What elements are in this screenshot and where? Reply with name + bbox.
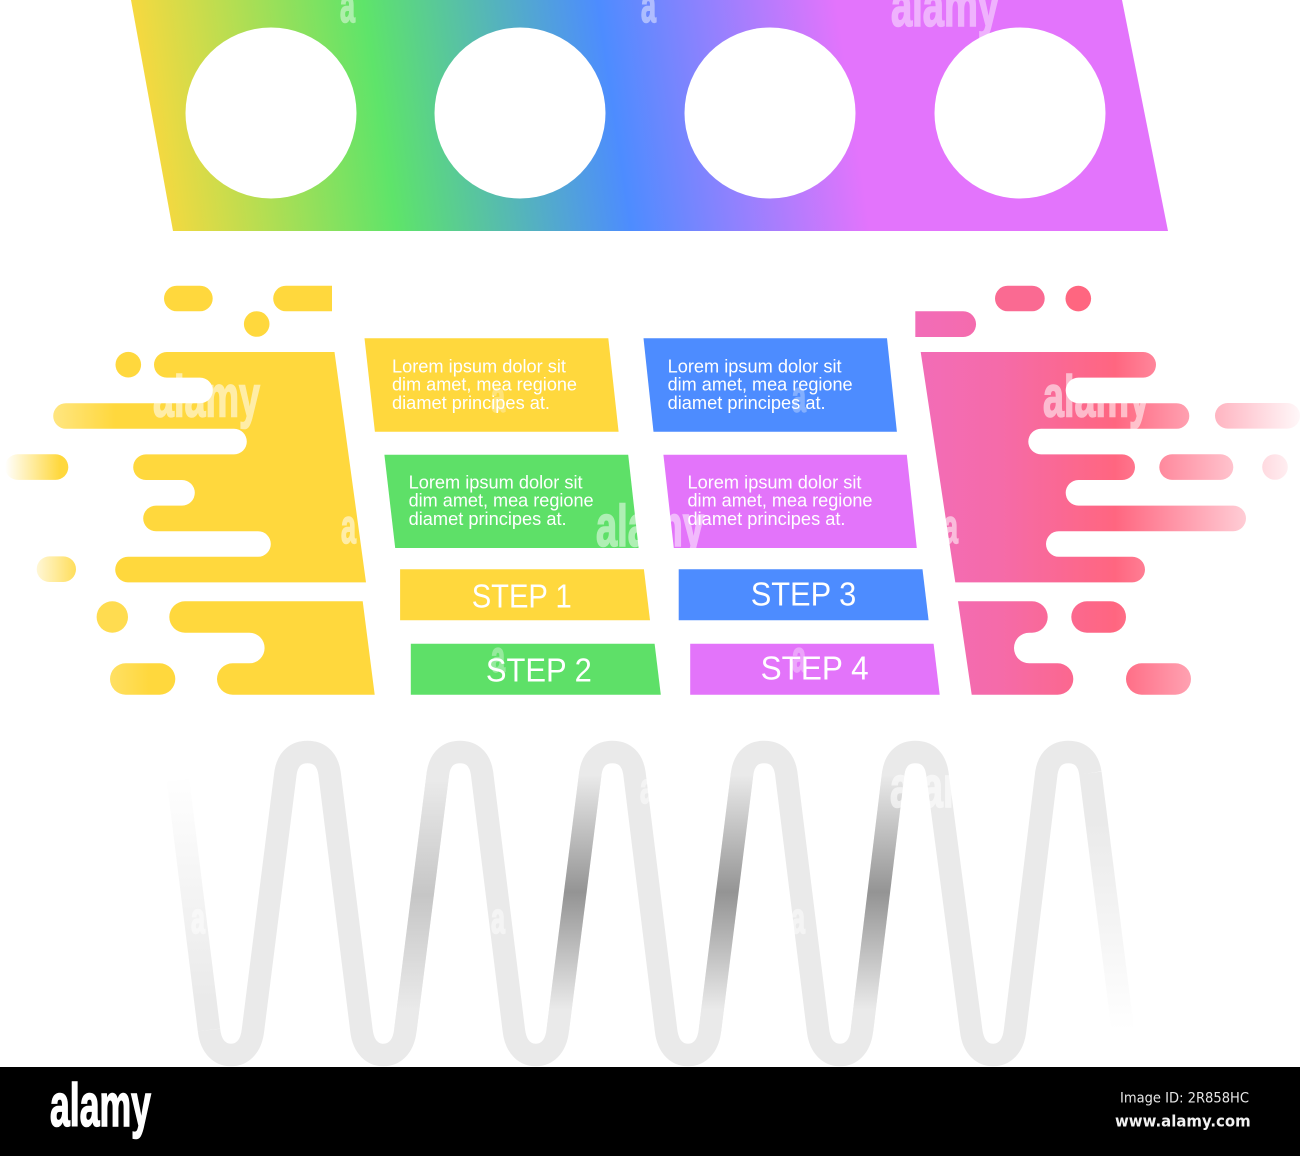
pink dot top [1066,286,1091,311]
circle 1 [186,28,356,198]
spring shaded leg 3 [558,773,590,1030]
text block green: dim amet, mea regione [409,491,594,511]
text block blue: Lorem ipsum dolor sit [668,357,842,377]
watermark a on blue panel: a [792,373,806,422]
watermark a on pink edge: a [943,501,958,554]
panel: blue lorem text [644,338,897,432]
pink pill top [995,286,1045,311]
panel: purple lorem text [663,455,917,548]
step 1 label: STEP 1 [472,577,572,614]
text block yellow: diamet principes at. [392,393,550,413]
grey zigzag spring [178,752,1123,1055]
circle 2 [434,28,606,198]
left yellow speed shape [5,286,375,695]
watermark a on step 4: a [792,633,806,682]
spring base line [209,752,1090,1055]
step 4 label: STEP 4 [761,649,869,686]
watermark a on spring 3: a [791,894,805,943]
text block yellow [392,357,577,413]
spring faded right end [1090,773,1123,1030]
right pink speed shape [915,286,1300,695]
pink fading pill far right [1215,403,1300,429]
watermark a on spring top: a [640,764,654,813]
yellow flat pill [273,286,332,311]
spring shaded leg 2 [405,773,438,1030]
yellow pale pill [37,556,76,582]
yellow dot left [116,352,141,378]
pink fading dot [1262,454,1288,480]
step 1 label [400,569,650,620]
watermark alamy on spring: alamy [890,755,998,820]
text block purple: dim amet, mea regione [688,491,872,511]
website url: www.alamy.com [1115,1112,1251,1131]
text block green [409,473,594,529]
text block green: diamet principes at. [409,509,567,529]
circle 3 [684,28,856,198]
panel: green lorem text [384,455,639,548]
pink lower fingers [958,601,1073,695]
spring faded left end [178,780,209,1030]
text block blue: diamet principes at. [668,393,826,413]
text block blue: dim amet, mea regione [668,375,853,395]
yellow upper fingers [53,352,366,582]
pink upper fingers [921,352,1246,582]
watermark a on spring 2: a [491,894,505,943]
spring shaded leg 5 [862,773,893,1030]
yellow big dot [97,601,128,633]
step 3 label [679,569,929,620]
watermark a on spring 1: a [191,894,205,943]
watermark pink alamy: alamy [1043,364,1150,430]
top gradient band with four circles [131,0,1168,231]
text block yellow: Lorem ipsum dolor sit [392,357,566,377]
yellow lower pill [110,663,175,695]
pink flat pill [915,311,976,337]
text block green: Lorem ipsum dolor sit [409,473,583,493]
watermark a on step 2: a [491,633,505,682]
step 2 label [411,644,661,695]
alamy logo: alamy [50,1072,151,1139]
watermarks [153,0,1150,943]
yellow pill top [164,286,213,311]
watermark a on yellow panel: a [491,373,505,422]
spring shaded leg 4 [710,773,742,1030]
text block blue [668,357,853,413]
circle 4 [934,28,1106,198]
pink fading pill middle [1159,454,1233,480]
text block purple: diamet principes at. [688,509,846,529]
step 4 label [690,644,940,695]
text block yellow: dim amet, mea regione [392,375,577,395]
step 3 label: STEP 3 [751,575,856,612]
yellow dot [244,311,270,337]
pink lower pill 1 [1071,601,1126,633]
yellow fading pill [5,454,68,480]
image id: Image ID: 2R858HC [1120,1091,1249,1107]
watermark a on yellow edge: a [341,501,356,554]
text block purple: Lorem ipsum dolor sit [688,473,862,493]
black footer bar [0,1067,1300,1156]
watermark yellow alamy: alamy [153,364,260,430]
watermark centre alamy: alamy [596,494,704,559]
step 2 label: STEP 2 [486,651,592,688]
yellow lower fingers [169,601,375,695]
text block purple [688,473,872,529]
pink lower pill 2 [1126,663,1191,695]
panel: yellow lorem text [364,338,619,432]
